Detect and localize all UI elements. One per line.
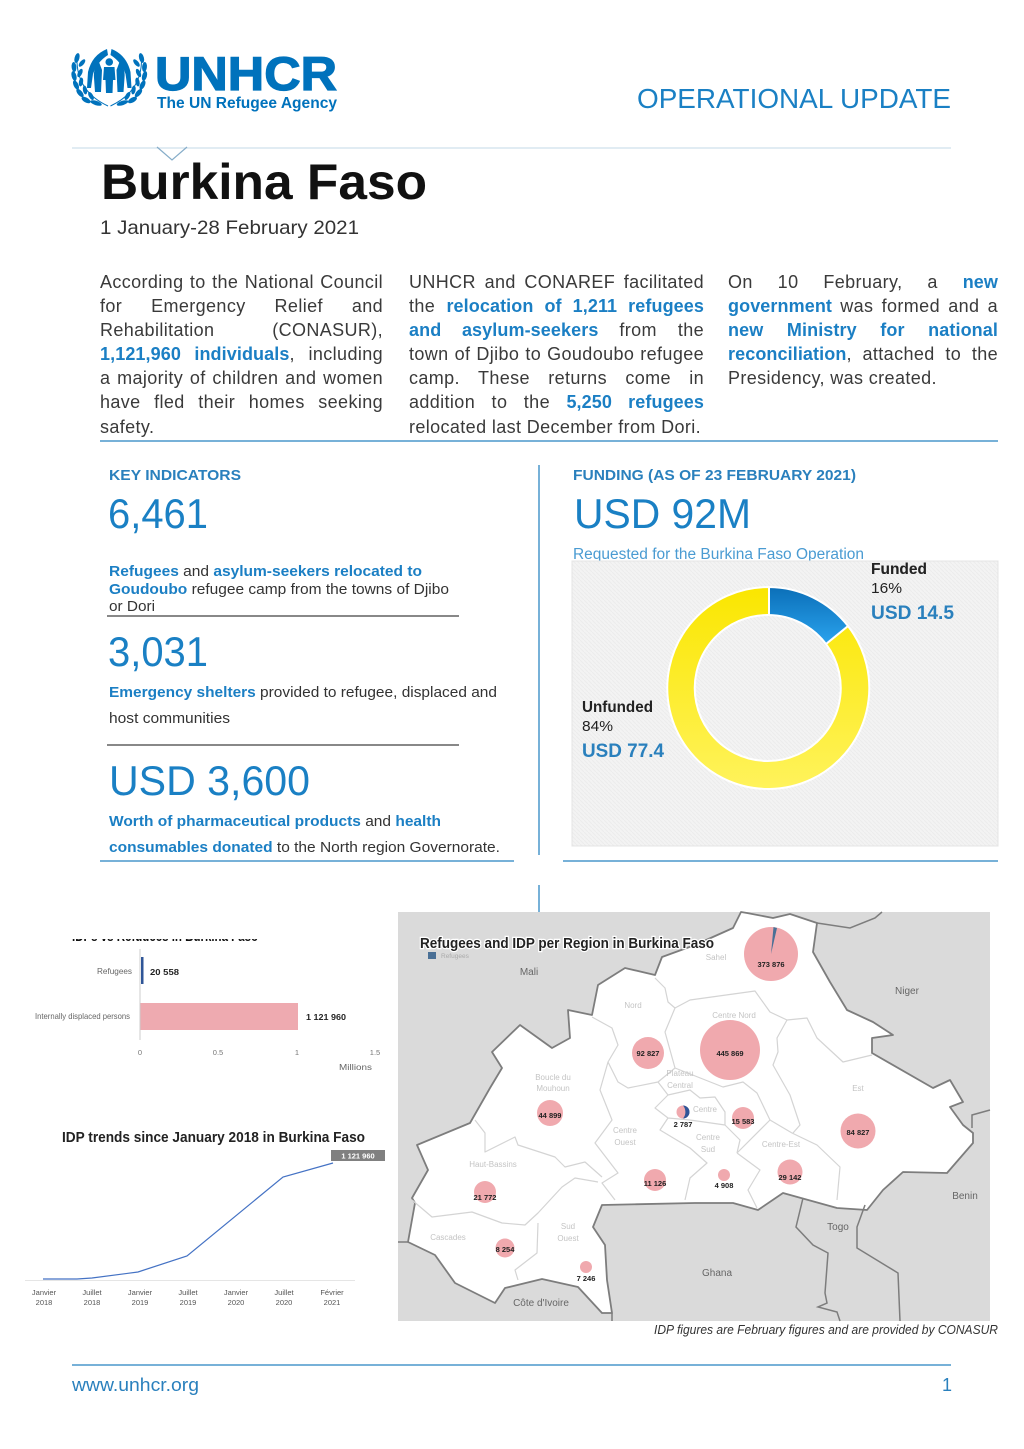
time axis labels: Juillet: [178, 1288, 198, 1297]
label: unfunded: Unfunded: [582, 699, 653, 716]
text block: column one: safety.: [100, 417, 154, 437]
indicator: emergency shelters: host communities: [109, 710, 230, 727]
indicator: emergency shelters: Emergency shelters provided to refugee, displaced and: [109, 684, 497, 701]
proportional bubbles: [474, 927, 876, 1273]
key indicators heading: KEY INDICATORS: [109, 467, 241, 484]
text block: column two: [409, 272, 704, 437]
page number: 1: [942, 1375, 952, 1395]
text block: column three: new Ministry for national: [728, 320, 998, 340]
panel: key indicators: [107, 467, 500, 856]
indicator: refugees relocated: Refugees and asylum-seekers relocated to: [109, 563, 422, 580]
indicator: pharmaceutical donation: USD 3,600: [109, 757, 310, 804]
text block: column one: for Emergency Relief and: [100, 296, 383, 316]
logo: UNHCR: [70, 47, 337, 112]
text block: column two: relocated last December from Dori.: [409, 417, 701, 437]
time axis labels: Juillet: [82, 1288, 102, 1297]
header divider with chevron: [72, 147, 951, 160]
title: Burkina Faso: [101, 154, 427, 210]
region labels: Centre: [693, 1105, 718, 1114]
text block: column two: the relocation of 1,211 refugees: [409, 296, 704, 316]
region labels: [430, 953, 865, 1243]
map legend: Refugees: [441, 953, 470, 960]
neighbouring country borders: [398, 912, 990, 1321]
end value label: 1 121 960: [341, 1152, 375, 1160]
time axis labels: 2020: [276, 1298, 292, 1307]
funding heading: FUNDING (AS OF 23 FEBRUARY 2021): [573, 467, 856, 484]
panel: funding: [572, 467, 998, 846]
indicator: refugees relocated: Goudoubo refugee camp from the towns of Djibo: [109, 581, 449, 598]
region labels: Boucle du: [535, 1073, 571, 1082]
bar chart: IDPs and refugees: Refugees: [97, 966, 132, 976]
text block: column one: a majority of children and women: [100, 368, 383, 388]
text block: column two: and asylum-seekers from the: [409, 320, 704, 340]
bubble values: 4 908: [715, 1181, 733, 1190]
region labels: Central: [667, 1081, 693, 1090]
refugee pie slices: [771, 927, 777, 954]
indicator: refugees relocated: [108, 490, 449, 615]
bubble values: 44 899: [539, 1111, 561, 1120]
time axis labels: 2019: [180, 1298, 196, 1307]
text block: column two: town of Djibo to Goudoubo refugee: [409, 344, 704, 364]
label: unfunded: USD 77.4: [582, 741, 664, 762]
text block: column two: addition to the 5,250 refugees: [409, 392, 704, 412]
donut: funded 16%: [769, 587, 848, 644]
map title: Refugees and IDP per Region in Burkina Faso: [420, 936, 714, 952]
donut chart panel: [572, 561, 998, 846]
text block: column one: have fled their homes seeking: [100, 392, 383, 412]
bubble values: 2 787: [674, 1120, 692, 1129]
bubble values: 11 126: [644, 1179, 666, 1188]
map footnote: IDP figures are February figures and are provided by CONASUR: [654, 1323, 998, 1337]
text block: column three: government was formed and a: [728, 296, 998, 316]
text block: column one: According to the National Council: [100, 272, 383, 292]
region labels: Centre: [613, 1126, 638, 1135]
region labels: Est: [852, 1084, 865, 1093]
region labels: Mouhoun: [536, 1084, 570, 1093]
text block: column two: camp. These returns come in: [409, 368, 704, 388]
bar chart: IDPs and refugees: 1 121 960: [306, 1012, 346, 1022]
bar chart: IDPs and refugees: 20 558: [150, 967, 179, 977]
region labels: Centre Nord: [712, 1011, 756, 1020]
document type heading: OPERATIONAL UPDATE: [637, 83, 951, 114]
label: unfunded: 84%: [582, 718, 613, 735]
Burkina Faso country shape: [408, 912, 973, 1313]
region boundaries: [412, 978, 872, 1280]
bar: internally displaced persons: [140, 1003, 298, 1030]
label: funded: 16%: [871, 580, 902, 597]
indicator: pharmaceutical donation: consumables donated to the North region Governorate.: [109, 839, 500, 856]
indicator: pharmaceutical donation: [109, 757, 500, 856]
map: refugees and IDPs per region: [398, 912, 990, 1321]
country labels: Niger: [895, 986, 920, 997]
region labels: Ouest: [614, 1138, 636, 1147]
footer website: www.unhcr.org: [71, 1375, 199, 1395]
text block: column one: Rehabilitation (CONASUR),: [100, 320, 383, 340]
text block: column three: On 10 February, a new: [728, 272, 998, 292]
region labels: Centre: [696, 1133, 721, 1142]
bubble values: 373 876: [757, 960, 785, 969]
country labels: Côte d'Ivoire: [513, 1298, 569, 1309]
country labels: Ghana: [702, 1268, 732, 1279]
region labels: Plateau: [666, 1069, 694, 1078]
text block: column three: reconciliation, attached to the: [728, 344, 998, 364]
time axis labels: Février: [320, 1288, 344, 1297]
indicator: emergency shelters: 3,031: [108, 628, 208, 675]
region labels: Haut-Bassins: [469, 1160, 517, 1169]
time axis labels: Juillet: [274, 1288, 294, 1297]
bar chart: IDPs and refugees: 0.5: [213, 1048, 223, 1057]
logo wordmark: UNHCR: [155, 47, 337, 100]
trend line: [43, 1163, 333, 1279]
bubble values: 84 827: [847, 1128, 869, 1137]
bar chart: IDPs and refugees: Internally displaced persons: [35, 1011, 130, 1021]
bubble values: 29 142: [779, 1173, 801, 1182]
end value label: [331, 1150, 385, 1161]
region labels: Cascades: [430, 1233, 466, 1242]
time axis labels: [32, 1288, 344, 1307]
country labels: Togo: [827, 1222, 849, 1233]
bubble values: 15 583: [732, 1117, 754, 1126]
indicator: refugees relocated: or Dori: [109, 598, 155, 615]
time axis labels: 2018: [36, 1298, 52, 1307]
donut: unfunded 84%: [667, 587, 869, 789]
bubble values: 8 254: [496, 1245, 515, 1254]
time axis labels: Janvier: [32, 1288, 57, 1297]
label: funded: [871, 561, 954, 624]
bubble values: [474, 960, 869, 1283]
text block: column three: [728, 272, 998, 388]
bubble values: 7 246: [577, 1274, 595, 1283]
funding subtitle: Requested for the Burkina Faso Operation: [573, 546, 864, 563]
map legend: [428, 952, 470, 960]
bubble values: 21 772: [474, 1193, 496, 1202]
label: unfunded: [582, 699, 664, 762]
funding total: USD 92M: [574, 490, 751, 537]
time axis labels: 2019: [132, 1298, 148, 1307]
country labels: Mali: [520, 967, 538, 978]
text block: column three: Presidency, was created.: [728, 368, 937, 388]
bar chart: IDPs and refugees: Millions: [339, 1062, 372, 1072]
logo tagline: The UN Refugee Agency: [157, 95, 337, 112]
icon: laurel and sheltering hands emblem: [70, 49, 148, 107]
date: 1 January-28 February 2021: [100, 217, 359, 239]
line chart: IDP trends: [25, 1130, 385, 1307]
time axis labels: 2020: [228, 1298, 244, 1307]
country labels: [513, 967, 978, 1309]
country labels: Benin: [952, 1191, 978, 1202]
bubble values: 92 827: [637, 1049, 659, 1058]
time axis labels: Janvier: [224, 1288, 249, 1297]
indicator: refugees relocated: 6,461: [108, 490, 208, 537]
region labels: Ouest: [557, 1234, 579, 1243]
footer: [71, 1365, 952, 1395]
bubble values: 445 869: [716, 1049, 744, 1058]
bar chart: IDPs and refugees: 0: [138, 1048, 142, 1057]
time axis labels: 2018: [84, 1298, 100, 1307]
bar chart: IDPs and refugees: [35, 928, 380, 1072]
region labels: Sud: [701, 1145, 715, 1154]
region labels: Centre-Est: [762, 1140, 801, 1149]
bar chart: IDPs and refugees: 1.5: [370, 1048, 380, 1057]
time axis labels: Janvier: [128, 1288, 153, 1297]
indicator: emergency shelters: [108, 628, 497, 727]
bar chart: IDPs and refugees: 1: [295, 1048, 299, 1057]
text block: column two: UNHCR and CONAREF facilitated: [409, 272, 704, 292]
region labels: Sud: [561, 1222, 575, 1231]
indicator: pharmaceutical donation: Worth of pharmaceutical products and health: [109, 813, 441, 830]
label: funded: USD 14.5: [871, 603, 954, 624]
bar: refugees: [141, 957, 144, 984]
label: funded: Funded: [871, 561, 927, 578]
text block: column one: 1,121,960 individuals, including: [100, 344, 383, 364]
region labels: Nord: [624, 1001, 642, 1010]
line chart title: IDP trends since January 2018 in Burkina Faso: [62, 1130, 365, 1146]
region labels: Sahel: [706, 953, 726, 962]
time axis labels: 2021: [324, 1298, 340, 1307]
text block: column one: [100, 272, 383, 437]
